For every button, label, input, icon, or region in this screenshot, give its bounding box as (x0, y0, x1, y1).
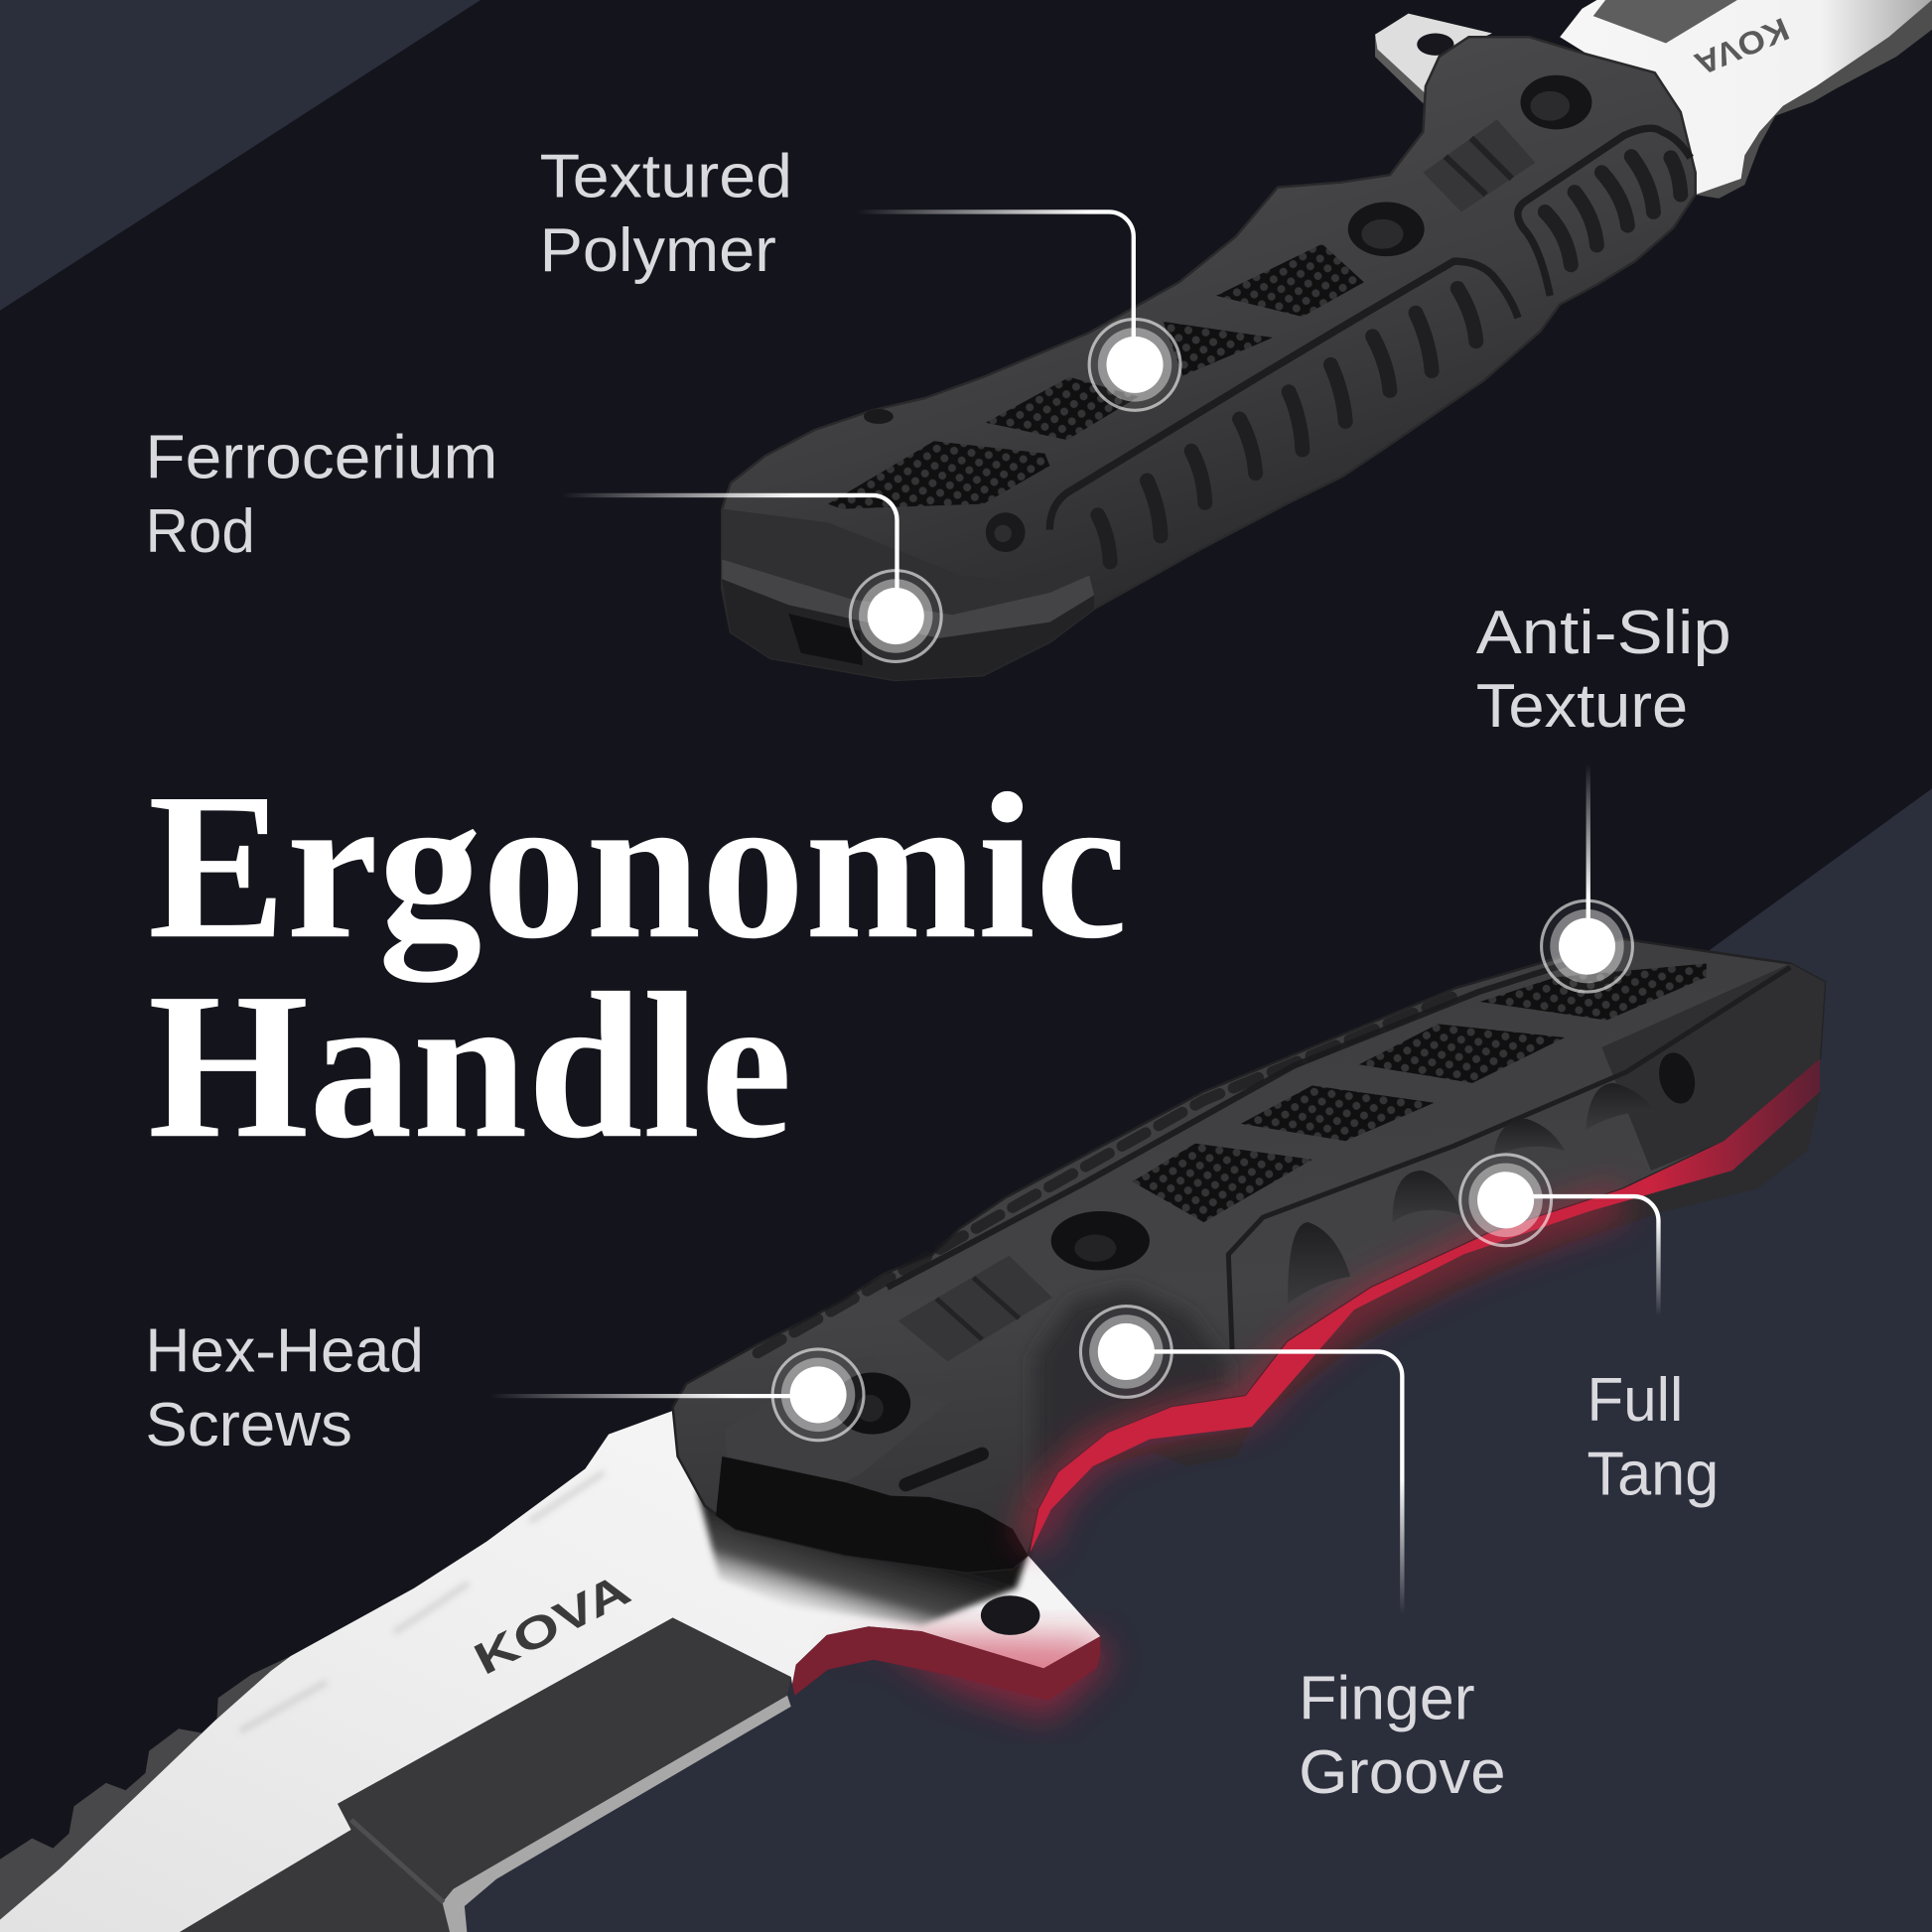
marker (772, 1349, 864, 1441)
label: Textured (540, 143, 792, 211)
label (540, 143, 792, 285)
blade streaks (240, 1472, 604, 1731)
leader line (857, 211, 1134, 364)
panel ridge (351, 1820, 444, 1902)
label: Hex-Head (145, 1316, 424, 1385)
title: Ergonomic (148, 750, 1128, 983)
label (1299, 1664, 1506, 1807)
title (148, 750, 1128, 1181)
label (145, 424, 497, 566)
corner shape: bottom right (357, 788, 1932, 1932)
corner shape: top left (0, 0, 481, 311)
callout: Anti-Slip Texture (1476, 599, 1731, 992)
grip texture panels: lower knife (1133, 964, 1707, 1222)
leader line (1126, 1351, 1402, 1614)
label: Rod (145, 497, 255, 566)
title: Handle (148, 949, 792, 1181)
screws: lower knife (834, 1048, 1701, 1435)
facets and grooves: lower knife (725, 949, 1825, 1484)
callout: Hex-Head Screws (145, 1316, 864, 1459)
leader line (1587, 763, 1589, 946)
marker (1460, 1155, 1552, 1246)
grip bars: top knife (1423, 119, 1535, 211)
blade: top knife (1560, 0, 1932, 199)
handle body: lower knife (673, 939, 1825, 1573)
label: Groove (1299, 1738, 1506, 1807)
marker (850, 571, 941, 661)
label: Ferrocerium (145, 424, 497, 492)
leader line (1506, 1196, 1658, 1315)
lower ribbed section: top knife (1049, 128, 1691, 562)
tang tab: top knife (1375, 14, 1492, 103)
label: Texture (1476, 672, 1688, 741)
blackened blade panel (180, 1618, 791, 1932)
butt end: top knife (722, 509, 1094, 680)
lower scale: under red tang (1097, 1092, 1820, 1466)
grip texture panels: top knife (828, 244, 1364, 509)
blade: lower knife (0, 1411, 1100, 1932)
black butt face (716, 1456, 1028, 1573)
screws: top knife (864, 75, 1591, 552)
marker (1089, 319, 1180, 410)
red tang strip (1031, 1058, 1820, 1553)
knife: side view with red full tang (0, 939, 1825, 1932)
lanyard hole (981, 1595, 1039, 1635)
marker (1080, 1307, 1172, 1397)
label: Anti-Slip (1476, 599, 1731, 667)
red tang tip (792, 1626, 1100, 1701)
handle body: top knife (722, 37, 1696, 680)
label: Tang (1587, 1440, 1719, 1508)
callout: Full Tang (1460, 1155, 1719, 1508)
blade spine serrations: lower knife (0, 1656, 291, 1920)
red glow (821, 1635, 1109, 1719)
label: Full (1587, 1366, 1683, 1435)
red glow on handle and background (1032, 1201, 1622, 1545)
label: Finger (1299, 1664, 1475, 1732)
leader line (489, 1394, 818, 1398)
blade edge bevel (443, 1696, 791, 1932)
label: Polymer (540, 216, 776, 285)
marker (1542, 900, 1632, 992)
callout: Textured Polymer (540, 143, 1180, 410)
finger scoops (1288, 1083, 1656, 1304)
handle fade into blade (697, 1491, 1028, 1625)
knife: top view of handle (722, 0, 1932, 680)
label: Screws (145, 1391, 352, 1459)
label (1476, 599, 1731, 741)
grip bars: lower knife (898, 1256, 1052, 1361)
logo: KOVA on top blade: KOVA (1690, 11, 1794, 82)
label (145, 1316, 424, 1459)
label (1587, 1366, 1719, 1508)
callout: Ferrocerium Rod (145, 424, 941, 661)
logo: KOVA on lower blade: KOVA (467, 1565, 638, 1685)
leader line (561, 495, 897, 617)
finger area shading (1035, 1288, 1226, 1506)
callout: Finger Groove (1080, 1307, 1506, 1807)
